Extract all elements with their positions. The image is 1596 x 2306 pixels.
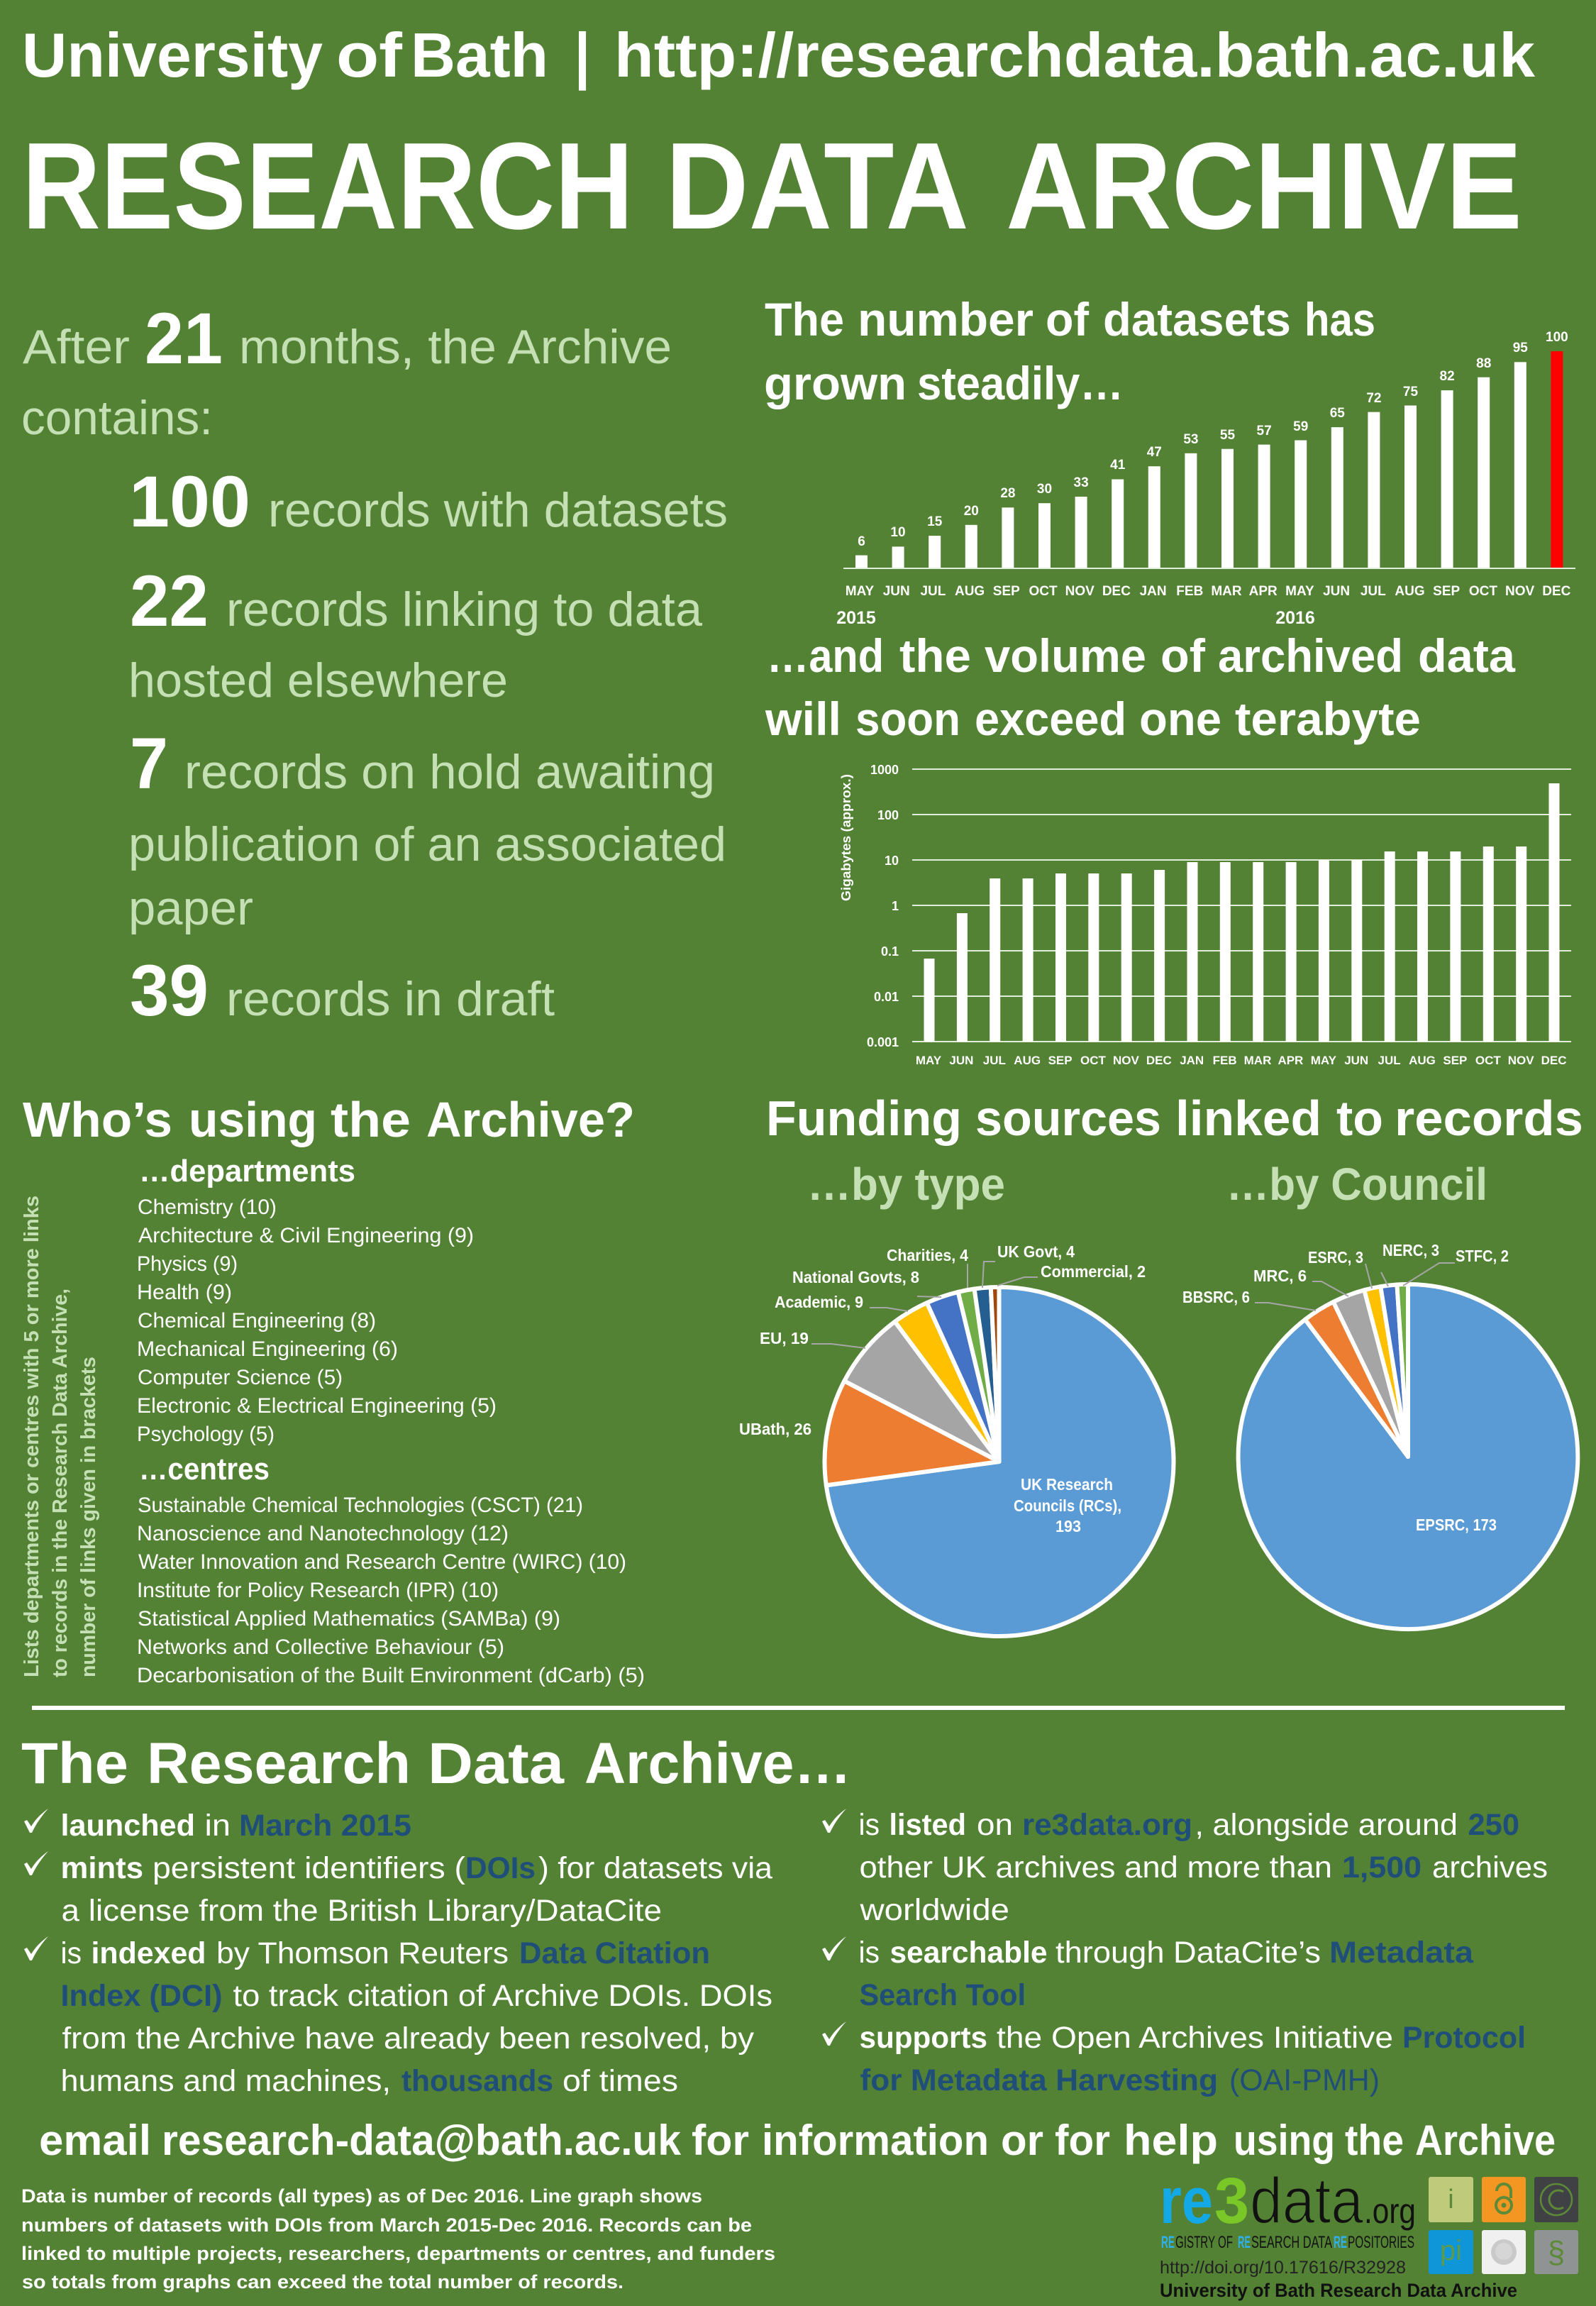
bar chart: archived volume, log scale: JUN [949,1054,973,1067]
indexed item: of times [563,2064,678,2098]
bar chart: archived volume, log scale: SEP [1048,1054,1073,1067]
bar chart: archived volume, log scale: 10 [885,854,899,868]
re3data logo and citation: data [1250,2165,1364,2237]
departments list: Computer Science (5) [138,1366,343,1389]
bar chart: archived volume, log scale: JAN [1180,1054,1204,1067]
heading: who's using: the [331,1092,411,1147]
panel: archive contents summary: hosted elsewhere [128,653,508,707]
bar chart: archived volume, log scale: OCT [1475,1054,1501,1067]
bar chart: archived volume, log scale: DEC [1146,1054,1172,1067]
supports item: for Metadata Harvesting [860,2063,1218,2097]
main title: ARCHIVE [1006,116,1522,255]
pie chart: by type: UK Govt, 4 [997,1242,1075,1261]
bar chart: datasets per month: 75 [1403,385,1418,399]
searchable item: is [858,1936,880,1970]
bar chart: datasets per month: JUL [1361,584,1386,599]
listed item: 250 [1468,1808,1519,1842]
pie chart: by type [739,1242,1174,1636]
centres list: Statistical Applied Mathematics (SAMBa) (9) [138,1607,560,1631]
heading: funding sources: linked [1175,1091,1321,1146]
header [22,20,1536,255]
bar chart: datasets per month: DEC [1542,584,1571,599]
pie chart: by council: STFC, 2 [1456,1247,1509,1265]
departments list: Health (9) [137,1281,232,1304]
bar chart: datasets per month: OCT [1029,584,1058,599]
indexed item: Index (DCI) [61,1979,223,2013]
pie chart: by type: National Govts, 8 [792,1268,919,1286]
heading: the research data archive [21,1731,851,1796]
heading: volume of archived data: …and [767,629,884,682]
launched item [61,1809,411,1843]
heading: the research data archive: The [21,1731,128,1796]
bar chart: datasets per month: 100 [1546,330,1568,345]
bar chart: datasets per month: 28 [1000,486,1015,501]
pie chart: by type: Academic, 9 [775,1293,863,1311]
main title: RESEARCH [22,116,633,255]
searchable item [858,1936,1474,2012]
centres list: Water Innovation and Research Centre (WIRC) (10) [138,1550,626,1574]
supports item: Protocol [1402,2021,1526,2055]
icon: paragraph badge [1534,2230,1578,2274]
pie chart: by type: Councils (RCs), [1014,1496,1121,1515]
rotated note: Lists departments or centres with 5 or more links [21,1196,43,1677]
university and url line: http://researchdata.bath.ac.uk [614,20,1536,90]
icon: info badge [1429,2177,1473,2222]
bar chart: datasets per month: 2015 [836,608,876,628]
re3data logo and citation: .org [1364,2191,1416,2231]
email call to action: Archive [1415,2117,1556,2164]
centres list: Sustainable Chemical Technologies (CSCT) (21) [138,1494,583,1517]
panel: archive contents summary: contains: [21,391,213,445]
listed item: on [977,1808,1013,1842]
pie chart: by council: ESRC, 3 [1308,1248,1363,1267]
footnote: Data is number of records (all types) as of Dec 2016. Line graph shows [21,2185,702,2207]
searchable item: through DataCite’s [1055,1936,1321,1970]
departments list: Architecture & Civil Engineering (9) [138,1224,474,1247]
heading: volume of archived data: soon [855,693,960,745]
heading: volume of archived data [765,629,1516,745]
university and url line: Bath [411,20,548,90]
bar chart: datasets per month: MAY [1285,584,1314,599]
indexed item: Data Citation [519,1936,710,1970]
bar chart: archived volume, log scale: 1000 [870,763,899,777]
re3data logo and citation [1160,2165,1517,2301]
rotated note: number of links given in brackets [77,1357,100,1677]
searchable item: searchable [890,1936,1047,1970]
bar chart: datasets per month [836,330,1575,628]
bar chart: archived volume, log scale: 0.1 [881,944,899,959]
supports item: the Open Archives Initiative [997,2021,1393,2055]
university and url line [22,20,1536,91]
subheading: by council: …by Council [1226,1159,1487,1210]
bar chart: datasets per month: DEC [1102,584,1131,599]
re3data logo and citation: SEARCH DATA [1251,2233,1332,2252]
heading: the research data archive: Research [147,1731,411,1796]
listed item: , alongside around [1195,1808,1458,1842]
footnote: numbers of datasets with DOIs from March 2015-Dec 2016. Records can be [21,2214,752,2236]
heading: the research data archive: Archive… [584,1731,851,1796]
icon: check [24,1809,48,1833]
bar chart: datasets per month: 10 [890,525,906,540]
mints item: a license from the British Library/DataCite [61,1894,662,1928]
heading: funding sources: to [1336,1091,1383,1146]
re3data logo and citation: re [1160,2165,1213,2237]
icon: info badge: i [1448,2185,1454,2214]
icon: seal badge [1482,2230,1526,2274]
heading: volume of archived data: data [1418,629,1516,682]
panel: archive contents summary: 100 [129,461,250,542]
pie chart: by type: EU, 19 [760,1329,809,1347]
indexed item: indexed [91,1936,206,1970]
heading: funding sources: records [1395,1091,1583,1146]
bar chart: datasets per month: 33 [1074,475,1089,490]
listed item: archives [1432,1850,1548,1885]
icon: pi badge: pi [1440,2235,1462,2266]
bar chart: archived volume, log scale: MAR [1244,1054,1271,1067]
departments list [137,1154,497,1446]
mints item [61,1851,772,1928]
heading: who's using [23,1092,635,1147]
main title: DATA [665,116,969,255]
bar chart: datasets per month: JAN [1140,584,1167,599]
bar chart: datasets per month: JUN [1323,584,1350,599]
bar chart: datasets per month: JUN [883,584,910,599]
listed item: worldwide [859,1893,1009,1927]
departments list: Chemistry (10) [138,1196,277,1219]
bar chart: datasets per month: SEP [993,584,1020,599]
listed item: re3data.org [1022,1808,1192,1842]
icon: check [822,1936,846,1960]
panel: archive features, right column [822,1808,1548,2097]
bar chart: datasets per month: 47 [1147,445,1162,460]
heading: volume of archived data: terabyte [1235,693,1421,745]
listed item: listed [890,1808,966,1842]
heading: number of datasets [764,293,1375,409]
bar chart: datasets per month: 88 [1476,356,1491,371]
bar chart: archived volume, log scale: MAY [1311,1054,1337,1067]
supports item: (OAI-PMH) [1229,2063,1380,2097]
pie chart: by council: NERC, 3 [1382,1241,1439,1259]
heading: volume of archived data: volume [985,629,1146,682]
panel: archive contents summary: publication of an associated [128,817,726,871]
pie chart: by type: UBath, 26 [739,1420,811,1438]
bar chart: datasets per month: 30 [1037,482,1052,497]
re3data badges [1429,2177,1578,2274]
pie chart: by council: EPSRC, 173 [1416,1516,1497,1534]
email call to action [39,2117,1556,2164]
re3data logo and citation: 3 [1214,2165,1249,2237]
panel: archive features, left column [24,1809,772,2098]
bar chart: datasets per month: 59 [1293,419,1308,434]
bar chart: archived volume, log scale [839,763,1571,1067]
bar chart: datasets per month: AUG [955,584,985,599]
bar chart: datasets per month: AUG [1395,584,1425,599]
pie chart: by council: MRC, 6 [1253,1267,1307,1285]
centres list: …centres [139,1452,270,1486]
bar chart: datasets per month: FEB [1176,584,1203,599]
listed item: other UK archives and more than [860,1850,1332,1885]
main title [22,116,1522,255]
bar chart: datasets per month: 57 [1257,424,1272,438]
bar chart: archived volume, log scale: AUG [1014,1054,1041,1067]
panel: archive contents summary: paper [128,881,253,935]
bar chart: archived volume, log scale: MAY [916,1054,942,1067]
heading: funding sources: sources [975,1091,1161,1146]
bar chart: datasets per month: NOV [1505,584,1535,599]
centres list: Networks and Collective Behaviour (5) [137,1635,504,1659]
panel: archive contents summary: records with datasets [268,483,728,537]
university and url line: University [22,20,323,90]
icon: check [24,1936,48,1960]
supports item: supports [860,2021,987,2055]
bar chart: archived volume, log scale: Gigabytes (approx.) [839,774,853,901]
icon: open access badge [1482,2177,1526,2222]
bar chart: archived volume, log scale: APR [1278,1054,1303,1067]
indexed item: by Thomson Reuters [216,1936,509,1970]
mints item: persistent identifiers ( [153,1851,466,1885]
bar chart: archived volume, log scale: FEB [1213,1054,1237,1067]
icon: paragraph badge: § [1548,2235,1565,2270]
footnote: so totals from graphs can exceed the total number of records. [22,2271,624,2293]
supports item [860,2021,1526,2097]
heading: funding sources [766,1091,1583,1146]
bar chart: datasets per month: 72 [1366,391,1381,406]
bar chart: archived volume, log scale: 0.001 [867,1035,899,1049]
bar chart: archived volume, log scale: 100 [877,808,899,822]
heading: number of datasets: grown [764,357,907,409]
heading: number of datasets: steadily… [917,357,1124,409]
indexed item: thousands [401,2064,553,2098]
bar chart: datasets per month: 55 [1220,428,1235,443]
bar chart: archived volume, log scale: JUL [1378,1054,1401,1067]
mints item: ) for datasets via [538,1851,772,1885]
departments list: Electronic & Electrical Engineering (5) [137,1394,497,1418]
bar chart: datasets per month: 20 [964,504,979,519]
pie chart: by type: 193 [1055,1517,1081,1535]
bar chart: datasets per month: OCT [1469,584,1497,599]
pie chart: by council [1182,1241,1578,1629]
heading: volume of archived data: will [765,693,841,745]
footnote: linked to multiple projects, researchers, departments or centres, and funders [21,2243,775,2264]
rotated note [21,1196,100,1677]
email call to action: for [692,2117,749,2164]
heading: volume of archived data: of [1160,629,1206,682]
pie chart: by type: Charities, 4 [887,1246,968,1264]
bar chart: archived volume, log scale: NOV [1508,1054,1534,1067]
bar chart: datasets per month: 82 [1440,369,1455,384]
bar chart: archived volume, log scale: SEP [1443,1054,1467,1067]
bar chart: datasets per month: 41 [1110,458,1126,473]
heading: volume of archived data: exceed [975,693,1126,745]
listed item: is [858,1808,880,1842]
icon: check [822,1809,846,1833]
panel: archive contents summary: months, the Archive [239,320,672,374]
bar chart: archived volume, log scale: NOV [1113,1054,1139,1067]
listed item: 1,500 [1342,1850,1422,1885]
university and url line: | [575,20,590,91]
bar chart: archived volume, log scale: OCT [1080,1054,1107,1067]
mints item: mints [61,1851,143,1885]
listed item [858,1808,1548,1927]
launched item: in [204,1809,231,1843]
heading: who's using: Archive? [426,1092,635,1147]
departments list: Chemical Engineering (8) [138,1309,376,1333]
departments list: …departments [139,1154,355,1188]
panel: archive contents summary: After [23,320,130,374]
panel: archive contents summary: 21 [145,298,223,379]
email call to action: help [1124,2117,1218,2164]
email call to action: using [1234,2117,1335,2164]
heading: number of datasets: of [1046,293,1090,346]
icon: check [822,2021,846,2046]
email call to action: for [1055,2117,1110,2164]
heading: who's using: using [189,1092,317,1147]
icon: copyright badge [1534,2177,1578,2222]
bar chart: archived volume, log scale: 1 [892,899,899,913]
bar chart: datasets per month: 65 [1330,406,1345,421]
panel: who is using the archive [21,1092,645,1687]
centres list: Institute for Policy Research (IPR) (10) [137,1579,499,1602]
panel: funding sources [739,1091,1583,1636]
re3data logo and citation: RE [1334,2233,1347,2252]
heading: volume of archived data: archived [1218,629,1403,682]
pie chart: by type: Commercial, 2 [1041,1262,1146,1281]
panel: archive contents summary: records linking to data [226,583,702,636]
indexed item [61,1936,772,2098]
bar chart: archived volume, log scale: DEC [1541,1054,1567,1067]
indexed item: is [61,1936,82,1970]
bar chart: datasets per month: SEP [1433,584,1461,599]
email call to action: research-data@bath.ac.uk [162,2117,682,2164]
panel: archive contents summary: 22 [130,561,209,641]
re3data logo and citation: POSITORIES [1348,2233,1414,2252]
launched item: March 2015 [239,1809,411,1843]
email call to action: email [39,2117,151,2164]
email call to action: or [1001,2117,1043,2164]
panel: archive contents summary: 39 [130,950,209,1031]
re3data logo and citation: University of Bath Research Data Archive [1160,2280,1517,2301]
icon: check [24,1851,48,1875]
icon: pi badge [1429,2230,1473,2274]
bar chart: datasets per month: 2016 [1275,608,1315,628]
searchable item: Metadata [1329,1936,1474,1970]
bar chart: datasets per month: MAR [1211,584,1242,599]
pie chart: by type: UK Research [1021,1475,1113,1494]
mints item: DOIs [465,1851,536,1885]
heading: number of datasets: The [765,293,844,346]
bar chart: datasets per month: 15 [927,514,943,529]
bar chart: datasets per month: APR [1249,584,1278,599]
re3data logo and citation: GISTRY OF [1175,2233,1233,2252]
bar chart: archived volume, log scale: AUG [1409,1054,1436,1067]
heading: who's using: Who’s [23,1092,172,1147]
centres list [137,1452,645,1687]
bar chart: datasets per month: NOV [1065,584,1095,599]
departments list: Physics (9) [137,1252,238,1276]
departments list: Mechanical Engineering (6) [137,1337,398,1361]
bar chart: datasets per month: 6 [858,534,865,549]
re3data logo and citation: http://doi.org/10.17616/R32928 [1160,2258,1406,2278]
bar chart: archived volume, log scale: JUL [983,1054,1006,1067]
launched item: launched [61,1809,195,1843]
panel: archive contents summary: records on hold awaiting [184,745,715,799]
bar chart: archived volume, log scale: 0.01 [874,990,899,1004]
heading: the research data archive: Data [428,1731,565,1796]
bar chart: datasets per month: 53 [1183,432,1198,447]
footnote [21,2185,775,2293]
panel: archive contents summary: records in draft [226,972,555,1026]
university and url line: of [336,20,403,90]
searchable item: Search Tool [860,1978,1026,2012]
re3data logo and citation: RE [1238,2233,1251,2252]
re3data logo and citation: RE [1161,2233,1175,2252]
email call to action: the [1345,2117,1404,2164]
bar chart: archived volume, log scale: JUN [1344,1054,1368,1067]
indexed item: humans and machines, [61,2064,391,2098]
rotated note: to records in the Research Data Archive, [49,1289,72,1677]
heading: number of datasets: number [858,293,1033,346]
indexed item: to track citation of Archive DOIs. DOIs [233,1979,772,2013]
indexed item: from the Archive have already been resolved, by [62,2021,755,2056]
bar chart: datasets per month: JUL [920,584,946,599]
panel: archive contents summary: 7 [130,723,168,804]
centres list: Decarbonisation of the Built Environment (dCarb) (5) [137,1664,645,1687]
pie chart: by council: BBSRC, 6 [1182,1288,1250,1306]
bar chart: datasets per month: 95 [1513,341,1528,355]
centres list: Nanoscience and Nanotechnology (12) [137,1522,509,1545]
heading: funding sources: Funding [766,1091,962,1146]
bar chart: datasets per month: MAY [846,584,875,599]
subheading: by type: …by type [807,1159,1005,1210]
panel: archive contents summary [21,298,728,1031]
heading: volume of archived data: one [1139,693,1221,745]
heading: number of datasets: has [1304,293,1375,346]
heading: volume of archived data: the [899,629,971,682]
departments list: Psychology (5) [137,1423,275,1446]
email call to action: information [762,2117,989,2164]
heading: number of datasets: datasets [1103,293,1291,346]
